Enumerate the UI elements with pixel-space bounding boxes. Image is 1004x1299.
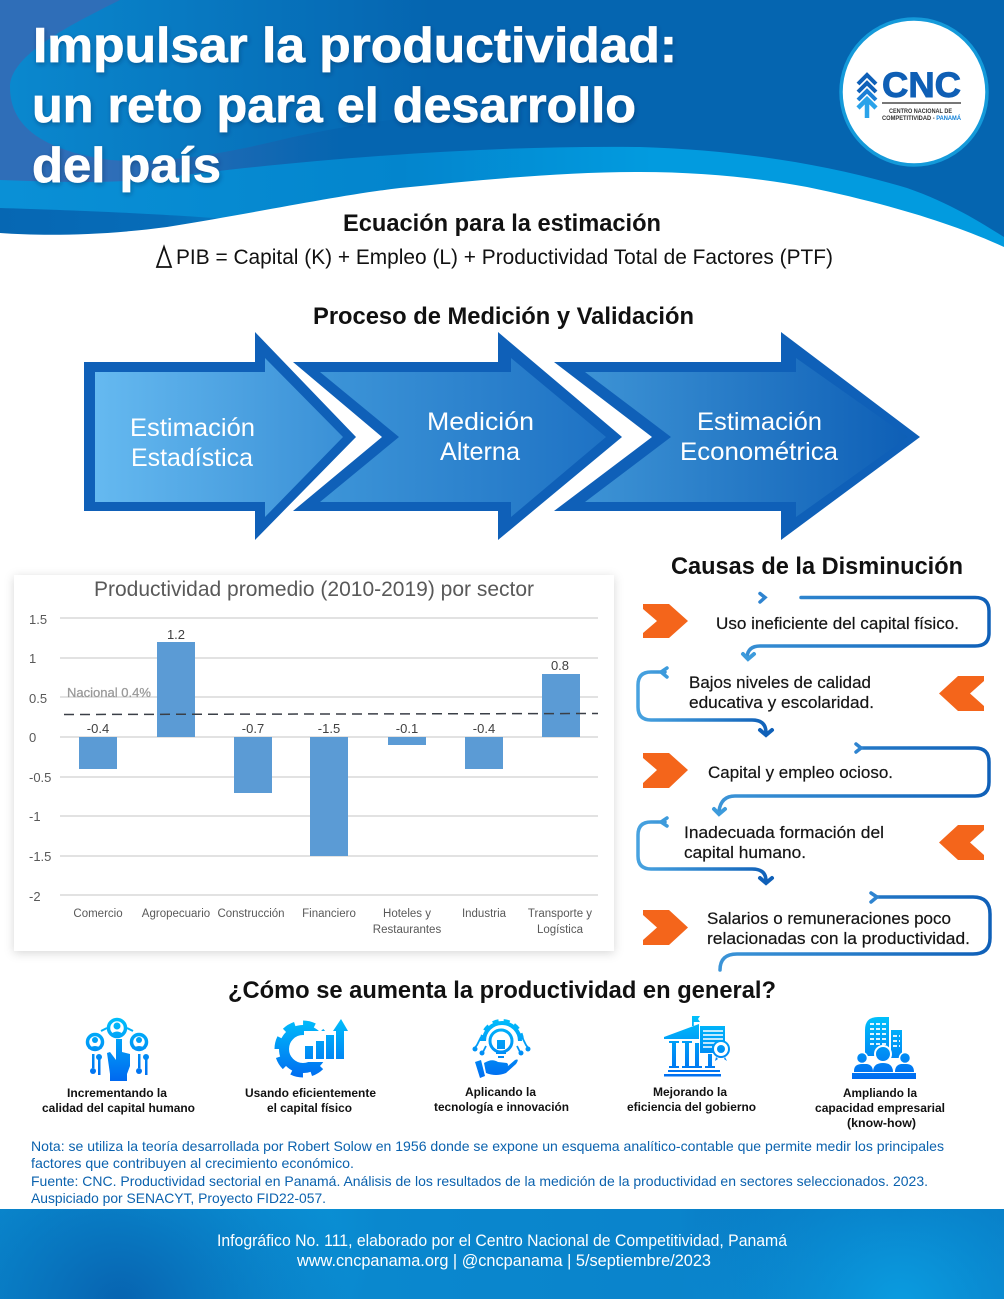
cause 4: capital humano. bbox=[684, 843, 806, 862]
logo: CNC: CENTRO NACIONAL DE bbox=[889, 109, 952, 115]
arrow: Medición Alterna: Medición bbox=[427, 408, 534, 436]
y axis labels: 1 bbox=[29, 651, 36, 666]
logo: CNC: COMPETITIVIDAD - PANAMÁ bbox=[882, 115, 962, 122]
heading: causes: Causas de la Disminución bbox=[671, 553, 963, 580]
label: government efficiency: Mejorando la bbox=[653, 1085, 727, 1099]
cause 5 bbox=[643, 893, 990, 970]
panel: causes flow bbox=[638, 594, 990, 970]
arrow: Estimación Econométrica: Econométrica bbox=[680, 438, 838, 466]
notes and source: Auspiciado por SENACYT, Proyecto FID22-057. bbox=[31, 1190, 326, 1206]
category labels: Agropecuario bbox=[142, 908, 210, 920]
arrow: Estimación Econométrica bbox=[554, 332, 920, 540]
category labels: Logística bbox=[537, 924, 584, 936]
arrow: Estimación Estadística: Estadística bbox=[131, 444, 253, 472]
bar value labels: -0.4 bbox=[473, 721, 495, 736]
logo: CNC: CNC bbox=[882, 66, 961, 105]
bar value labels: -0.4 bbox=[87, 721, 109, 736]
icon: human capital bbox=[88, 1020, 149, 1081]
label: technology and innovation bbox=[434, 1085, 569, 1114]
category labels bbox=[73, 908, 592, 936]
process arrows bbox=[84, 332, 920, 540]
cause 1: Uso ineficiente del capital físico. bbox=[716, 614, 959, 633]
cause 4: Inadecuada formación del bbox=[684, 823, 884, 842]
cause 5: relacionadas con la productividad. bbox=[707, 929, 970, 948]
cause 2: Bajos niveles de calidad bbox=[689, 673, 871, 692]
y axis labels: -2 bbox=[29, 889, 41, 904]
label: human capital: calidad del capital humano bbox=[42, 1101, 195, 1115]
category labels: Financiero bbox=[302, 908, 356, 920]
icon: government efficiency bbox=[664, 1016, 729, 1076]
cause 3: Capital y empleo ocioso. bbox=[708, 763, 893, 782]
label: government efficiency: eficiencia del gobierno bbox=[627, 1100, 756, 1114]
cause 1 bbox=[643, 594, 989, 659]
category labels: Hoteles y bbox=[383, 908, 431, 920]
icon: physical capital bbox=[277, 1019, 350, 1075]
title: un reto para el desarrollo bbox=[32, 79, 636, 133]
chart title: Productividad promedio (2010-2019) por sector bbox=[94, 578, 534, 601]
cause 3 bbox=[643, 744, 989, 814]
notes and source bbox=[31, 1138, 944, 1206]
icon: technology and innovation bbox=[472, 1021, 530, 1078]
y axis labels bbox=[29, 612, 51, 904]
header banner bbox=[0, 0, 1004, 300]
panel: bar chart bbox=[14, 575, 614, 951]
category labels: Industria bbox=[462, 908, 507, 920]
arrow: Medición Alterna: Alterna bbox=[440, 438, 520, 466]
notes and source: Fuente: CNC. Productividad sectorial en Panamá. Análisis de los resultados de la medición de la productividad en sectores seleccionados. 2023. bbox=[31, 1173, 928, 1189]
cause 4 bbox=[638, 818, 984, 883]
category labels: Construcción bbox=[217, 908, 285, 920]
category labels: Comercio bbox=[73, 908, 123, 920]
arrow: Medición Alterna bbox=[293, 332, 622, 540]
heading: equation: Ecuación para la estimación bbox=[343, 210, 661, 237]
arrow: Estimación Econométrica: Estimación bbox=[697, 408, 822, 436]
notes and source: Nota: se utiliza la teoría desarrollada por Robert Solow en 1956 donde se expone un esquema analítico-contable que permite medir los principales bbox=[31, 1138, 944, 1154]
label: business capacity bbox=[815, 1086, 945, 1130]
category labels: Restaurantes bbox=[373, 924, 441, 936]
label: technology and innovation: Aplicando la bbox=[465, 1085, 536, 1099]
heading: process: Proceso de Medición y Validación bbox=[313, 303, 694, 330]
title: Impulsar la productividad: bbox=[33, 19, 677, 73]
label: business capacity: Ampliando la bbox=[843, 1086, 917, 1100]
equation: PIB = Capital (K) + Empleo (L) + Productividad Total de Factores (PTF) bbox=[176, 246, 833, 269]
y axis labels: 0 bbox=[29, 730, 36, 745]
label: physical capital: Usando eficientemente bbox=[245, 1086, 376, 1100]
bar value labels: 0.8 bbox=[551, 658, 569, 673]
y axis labels: 1.5 bbox=[29, 612, 47, 627]
icon: business capacity bbox=[852, 1017, 916, 1079]
bar value labels: -0.1 bbox=[396, 721, 418, 736]
y axis labels: -1 bbox=[29, 809, 41, 824]
footer bbox=[0, 1209, 1004, 1299]
label: technology and innovation: tecnología e innovación bbox=[434, 1100, 569, 1114]
y axis labels: -1.5 bbox=[29, 849, 51, 864]
bars bbox=[79, 642, 580, 856]
label: business capacity: capacidad empresarial bbox=[815, 1101, 945, 1115]
title: del país bbox=[32, 139, 221, 193]
notes and source: factores que contribuyen al crecimiento económico. bbox=[31, 1155, 354, 1171]
national average label: Nacional 0.4% bbox=[67, 686, 151, 700]
cause 5: Salarios o remuneraciones poco bbox=[707, 909, 951, 928]
logo: CNC bbox=[841, 19, 987, 165]
bar value labels: -1.5 bbox=[318, 721, 340, 736]
bar value labels bbox=[87, 627, 569, 736]
category labels: Transporte y bbox=[528, 908, 592, 920]
bar value labels: -0.7 bbox=[242, 721, 264, 736]
footer: Infográfico No. 111, elaborado por el Centro Nacional de Competitividad, Panamá bbox=[217, 1232, 788, 1250]
footer: www.cncpanama.org | @cncpanama | 5/septiembre/2023 bbox=[296, 1252, 711, 1270]
national average line bbox=[64, 714, 598, 715]
label: business capacity: (know-how) bbox=[847, 1116, 916, 1130]
cause 2 bbox=[638, 668, 984, 735]
title bbox=[32, 19, 677, 193]
label: human capital: Incrementando la bbox=[67, 1086, 167, 1100]
label: physical capital bbox=[245, 1086, 376, 1115]
label: physical capital: el capital físico bbox=[267, 1101, 352, 1115]
bar value labels: 1.2 bbox=[167, 627, 185, 642]
arrow: Estimación Estadística bbox=[84, 332, 356, 540]
label: human capital bbox=[42, 1086, 195, 1115]
cause 2: educativa y escolaridad. bbox=[689, 693, 874, 712]
label: government efficiency bbox=[627, 1085, 756, 1114]
arrow: Estimación Estadística: Estimación bbox=[130, 414, 255, 442]
y axis labels: 0.5 bbox=[29, 691, 47, 706]
heading: how to increase productivity: ¿Cómo se aumenta la productividad en general? bbox=[228, 977, 776, 1004]
y axis labels: -0.5 bbox=[29, 770, 51, 785]
